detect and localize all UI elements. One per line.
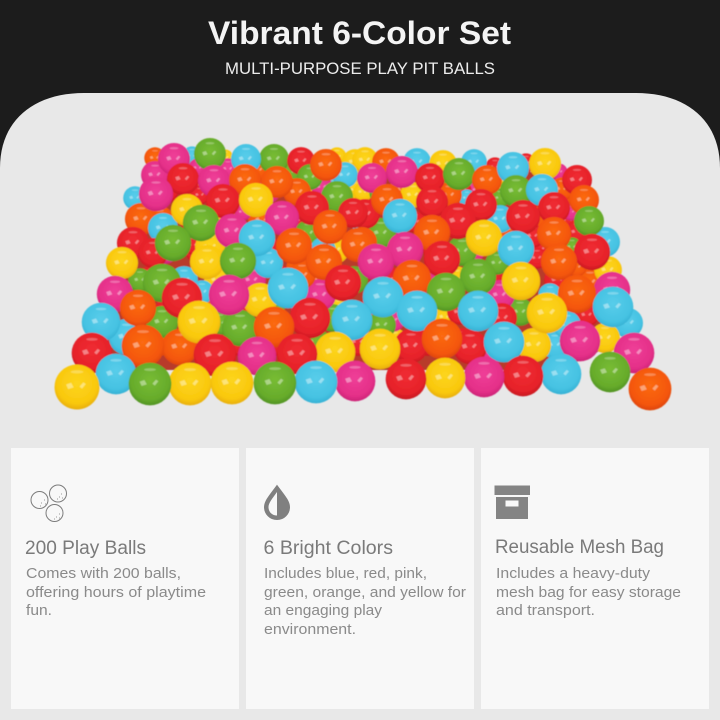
description: Comes with 200 balls, [26, 565, 181, 582]
description: environment. [264, 621, 356, 638]
panel: reusable mesh bag [481, 448, 709, 709]
icon: half-filled water drop [264, 486, 290, 520]
header band [0, 0, 720, 200]
heading: 200 Play Balls [25, 538, 146, 559]
photo: pile of colorful play balls [55, 138, 671, 410]
panel: 200 play balls [11, 448, 239, 709]
description: fun. [26, 602, 52, 619]
description: mesh bag for easy storage [496, 584, 681, 601]
heading: 6 Bright Colors [264, 538, 393, 559]
description [264, 565, 466, 638]
description: Includes blue, red, pink, [264, 565, 427, 582]
description: and transport. [496, 602, 595, 619]
description: offering hours of playtime [26, 584, 206, 601]
heading: Reusable Mesh Bag [495, 537, 664, 558]
description [496, 565, 681, 619]
description [26, 565, 206, 619]
description: green, orange, and yellow for [264, 584, 466, 601]
icon: storage box [494, 486, 530, 519]
subtitle: MULTI-PURPOSE PLAY PIT BALLS [225, 60, 495, 78]
title: Vibrant 6-Color Set [208, 15, 511, 51]
panel: 6 bright colors [246, 448, 474, 709]
description: an engaging play [264, 602, 383, 619]
description: Includes a heavy-duty [496, 565, 651, 582]
icon: three balls [31, 485, 66, 522]
